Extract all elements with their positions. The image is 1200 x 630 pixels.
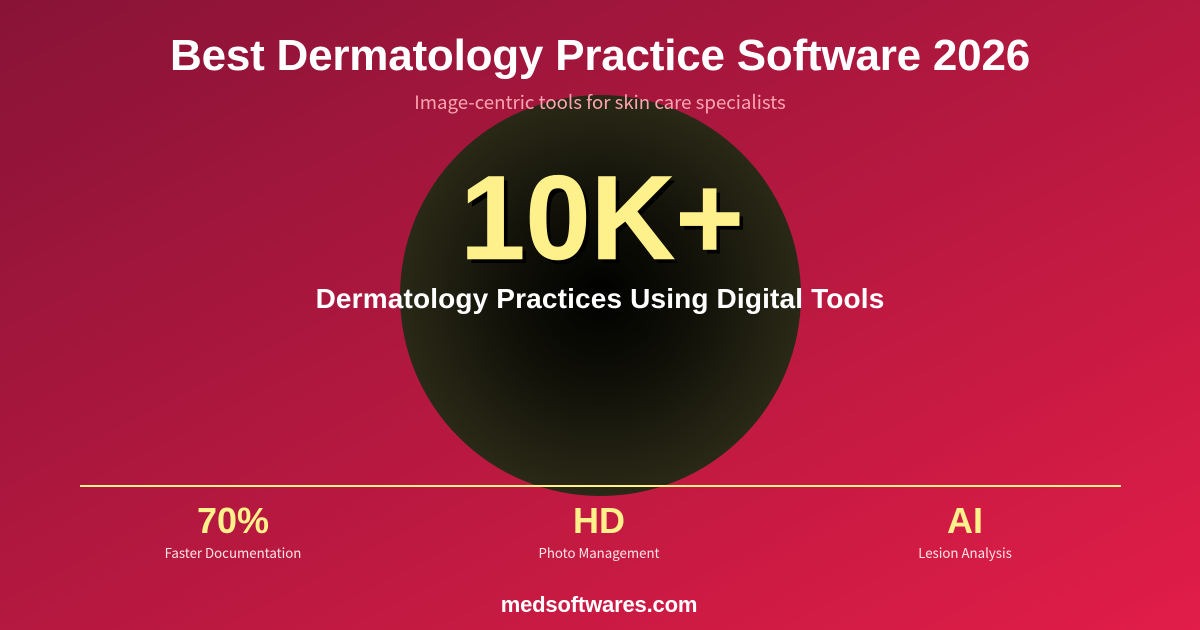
stat: 70% xyxy=(165,500,301,562)
big stat: 10K+: 10K+ xyxy=(460,151,743,285)
stat caption: Faster Documentation xyxy=(165,543,301,562)
stat: AI xyxy=(918,500,1012,562)
footer website: medsoftwares.com xyxy=(501,592,697,617)
stat: HD xyxy=(538,500,660,562)
stat caption: Lesion Analysis xyxy=(918,543,1012,562)
stat value: AI xyxy=(947,500,983,541)
divider line xyxy=(80,485,1121,487)
stat caption: Photo Management xyxy=(538,543,660,562)
hero circle xyxy=(400,95,801,496)
big stat label: Dermatology Practices Using Digital Tools xyxy=(316,283,884,314)
title: Best Dermatology Practice Software 2026 xyxy=(170,31,1030,80)
subtitle: Image-centric tools for skin care specialists xyxy=(414,88,786,115)
stat value: 70% xyxy=(197,500,269,541)
stat value: HD xyxy=(573,500,625,541)
